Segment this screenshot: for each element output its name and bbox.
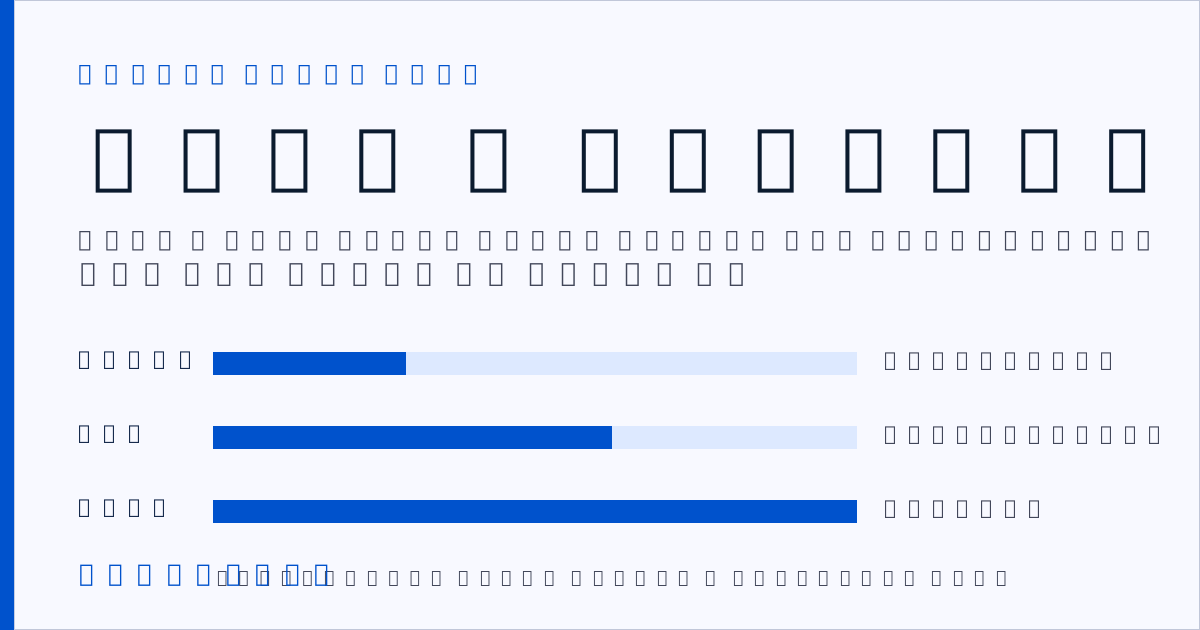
bar row 2 [78, 420, 1160, 449]
bar row 2:  [884, 421, 1160, 445]
bar row 2:  [78, 420, 140, 444]
bar row 1:  [78, 346, 191, 370]
bar row 1:  [884, 347, 1112, 371]
subtitle line 2:  [80, 258, 744, 288]
bar row 3:  [884, 495, 1040, 519]
eyebrow:  [78, 61, 477, 86]
footer source:  [79, 560, 328, 588]
footer note:  [217, 568, 1006, 588]
subtitle line 1:  [78, 227, 1150, 252]
title:  [92, 113, 1149, 197]
bar row 3:  [78, 494, 165, 518]
bar row 1 [78, 346, 1112, 375]
bar row 3 [78, 494, 1040, 523]
accent bar [0, 0, 14, 630]
